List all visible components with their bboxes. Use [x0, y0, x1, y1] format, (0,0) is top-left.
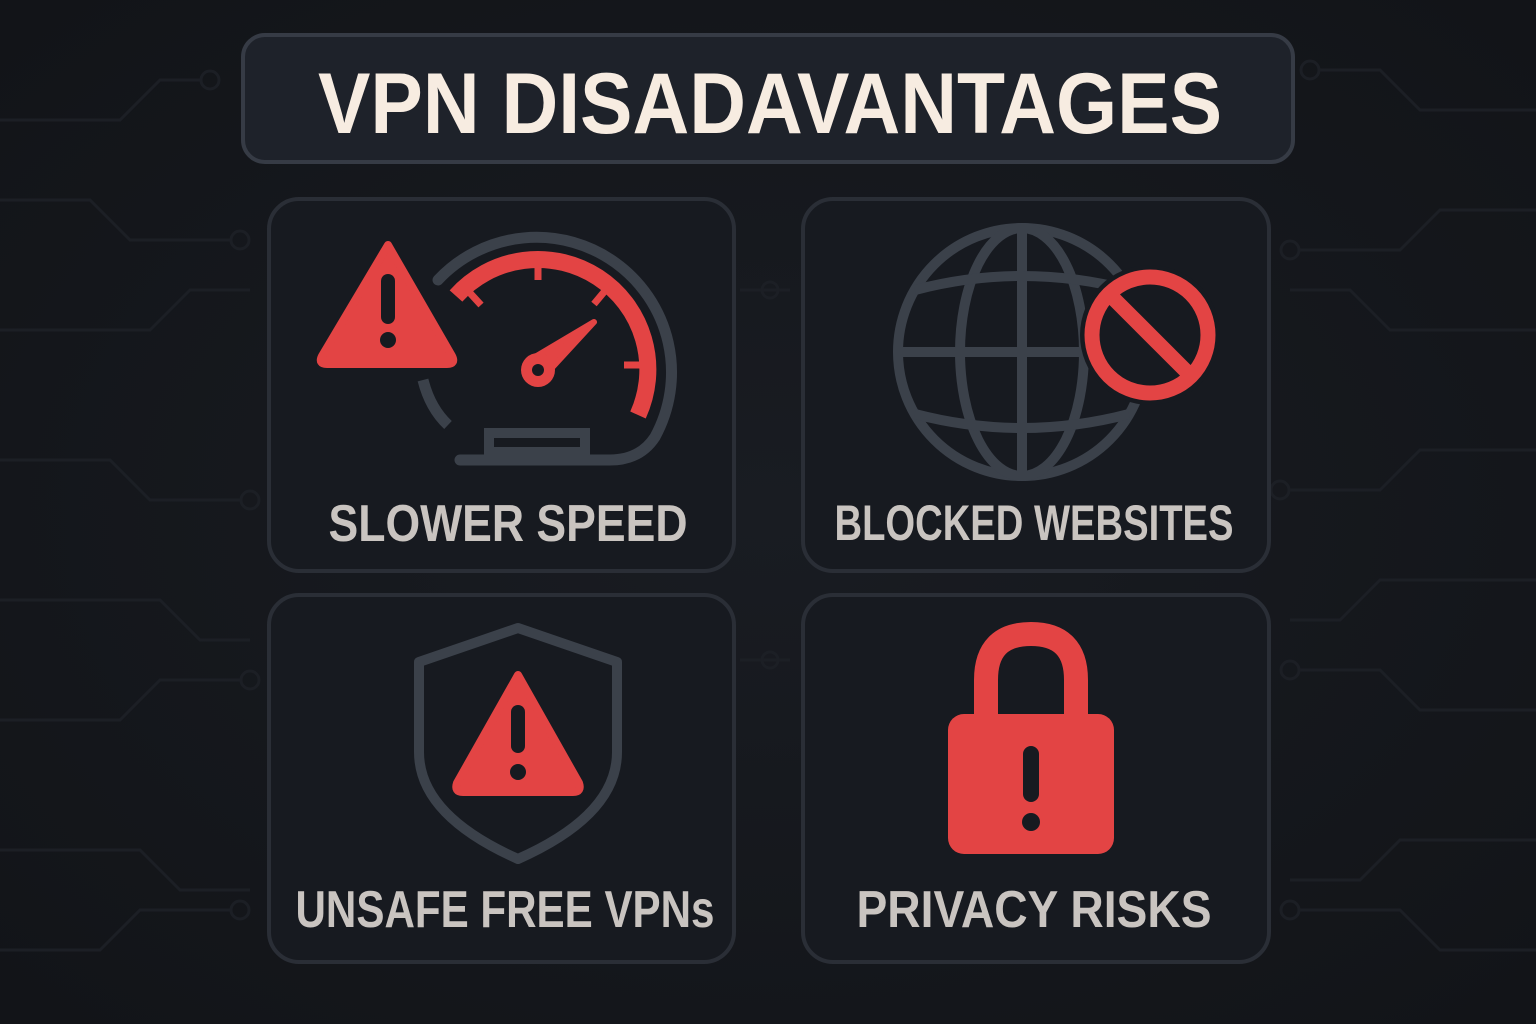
- panel: privacy risks: [803, 595, 1269, 962]
- title: [243, 35, 1293, 162]
- icon: shield with warning: [419, 628, 617, 859]
- panel: unsafe free vpns: [269, 595, 734, 962]
- panel: blocked websites: [803, 199, 1269, 571]
- icon: padlock: [948, 634, 1114, 854]
- title: VPN DISADAVANTAGES: [318, 56, 1222, 152]
- label: privacy risks: PRIVACY RISKS: [856, 881, 1212, 939]
- icon: speedometer: [423, 237, 672, 460]
- label: blocked websites: BLOCKED WEBSITES: [834, 495, 1234, 551]
- label: unsafe free vpns: UNSAFE FREE VPNs: [296, 881, 714, 939]
- icon: warning triangle: [321, 245, 453, 364]
- icon: globe: [898, 228, 1146, 476]
- icon: prohibited sign: [1080, 265, 1220, 405]
- label: slower speed: SLOWER SPEED: [328, 495, 688, 553]
- panel: slower speed: [269, 199, 734, 571]
